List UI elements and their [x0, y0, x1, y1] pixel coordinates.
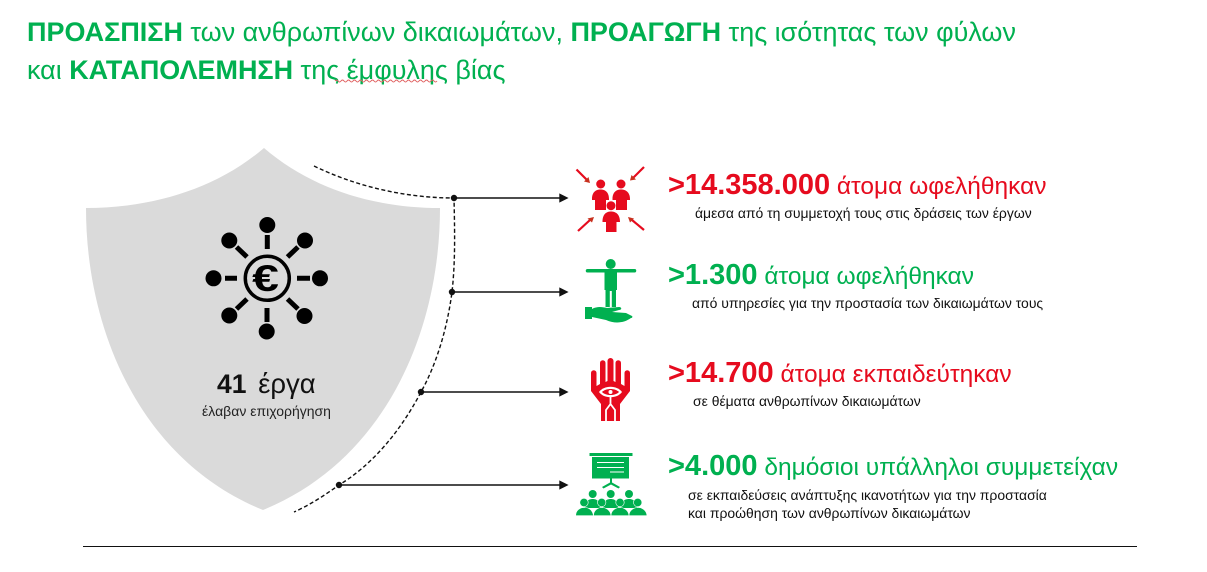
arrow 4: [336, 482, 567, 488]
text: item 2: από υπηρεσίες για την προστασία των δικαιωμάτων τους: [692, 295, 1043, 311]
text: item 4: σε εκπαιδεύσεις ανάπτυξης ικανοτήτων για την προστασία: [688, 487, 1047, 503]
text: item 1: άμεσα από τη συμμετοχή τους στις δράσεις των έργων: [695, 205, 1032, 221]
text: item 3: >14.700 άτομα εκπαιδεύτηκαν: [668, 357, 1012, 389]
shield caption: έλαβαν επιχορήγηση: [202, 403, 331, 419]
title: [27, 17, 1016, 85]
icon: euro network: [206, 217, 328, 340]
text: item 2: [668, 259, 1043, 311]
shield: [86, 148, 440, 510]
text: item 1: >14.358.000 άτομα ωφελήθηκαν: [668, 169, 1047, 201]
text: item 3: [668, 357, 1012, 409]
dashed arc: [294, 166, 455, 512]
icon: person on hand: [585, 259, 636, 322]
icon: audience and presentation board: [576, 453, 647, 516]
text: item 3: σε θέματα ανθρωπίνων δικαιωμάτων: [693, 393, 921, 409]
icon: hands with eye: [591, 358, 630, 421]
title: ΠΡΟΑΣΠΙΣΗ των ανθρωπίνων δικαιωμάτων, ΠΡΟΑΓΩΓΗ της ισότητας των φύλων: [27, 17, 1016, 47]
icon: people gathering: [576, 167, 644, 232]
text: item 4: και προώθηση των ανθρωπίνων δικαιωμάτων: [688, 505, 971, 521]
text: item 4: [668, 450, 1118, 521]
arrow 1: [452, 194, 567, 202]
text: item 2: >1.300 άτομα ωφελήθηκαν: [668, 259, 974, 291]
arrow 3: [418, 388, 567, 396]
icon: euro network: €: [252, 258, 279, 300]
text: item 4: >4.000 δημόσιοι υπάλληλοι συμμετείχαν: [668, 450, 1118, 482]
title: και ΚΑΤΑΠΟΛΕΜΗΣΗ της έμφυλης βίας: [27, 55, 505, 85]
arrow 2: [450, 288, 567, 296]
shield figure: 41 projects: 41 έργα: [217, 368, 316, 399]
text: item 1: [668, 169, 1047, 221]
